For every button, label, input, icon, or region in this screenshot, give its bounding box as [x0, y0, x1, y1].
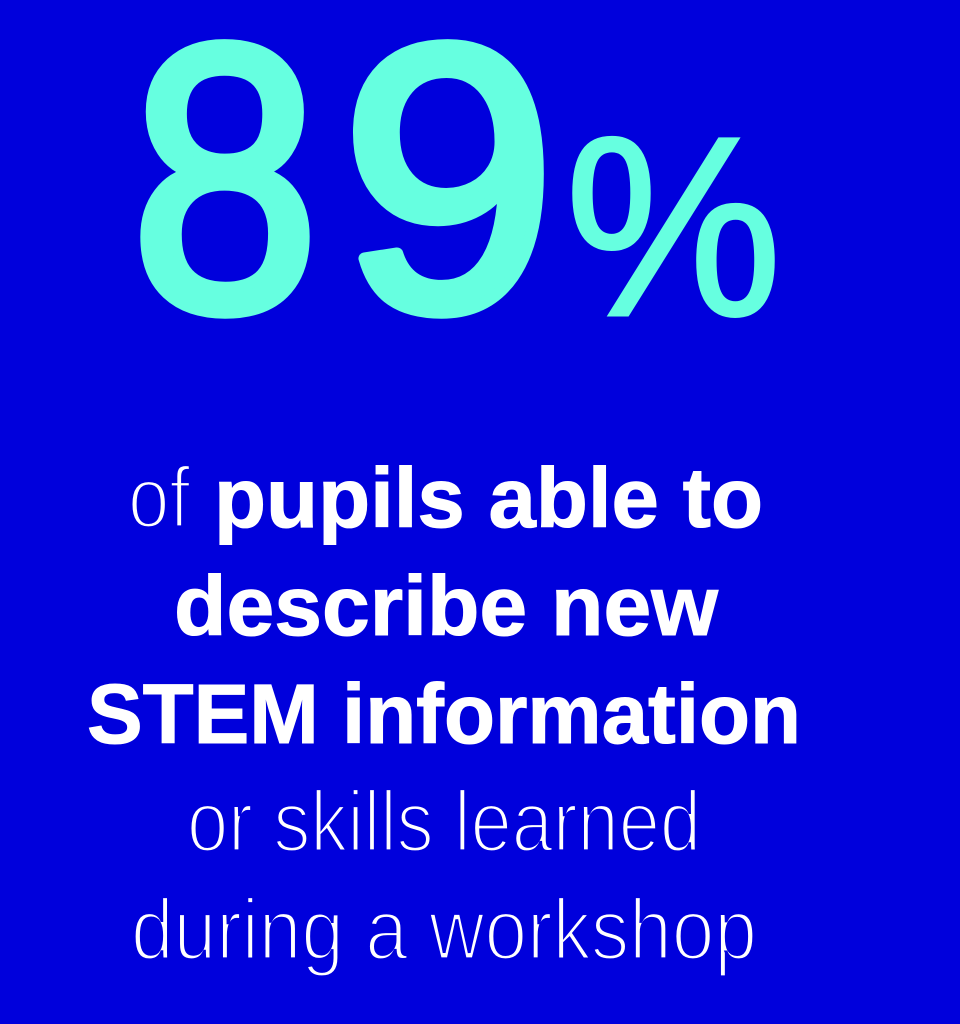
- description text: [87, 450, 801, 978]
- description text: pupils able to: [214, 451, 763, 545]
- description text: describe new: [174, 559, 719, 653]
- big statistic: 89%: %: [565, 84, 782, 370]
- description text: during a workshop: [131, 882, 757, 978]
- big statistic: 89%: [131, 0, 782, 390]
- description text: or skills learned: [187, 774, 701, 870]
- description text: of: [128, 450, 191, 546]
- description text: STEM information: [87, 667, 801, 761]
